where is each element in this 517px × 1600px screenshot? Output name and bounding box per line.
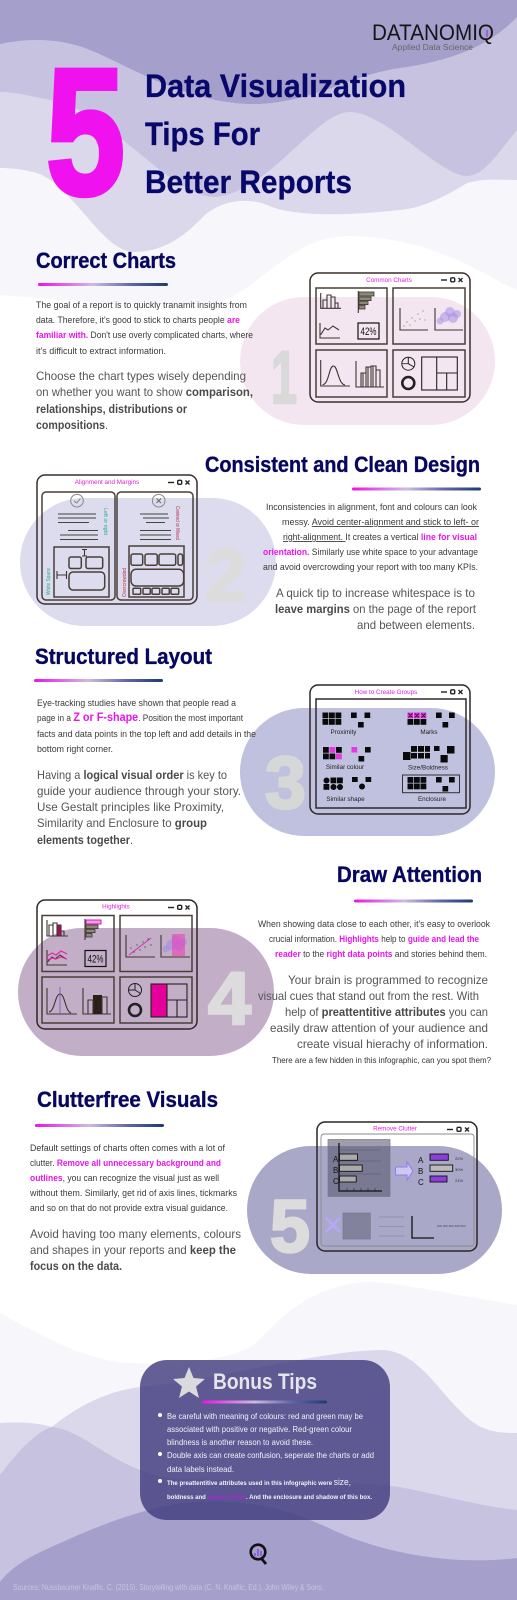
- bullet text: boldness and colour or text. And the enclosure and shadow of this box.: [167, 1494, 372, 1501]
- panel: 2 consistent and clean design: [20, 452, 481, 632]
- window: how to create groups: How to Create Groups: [355, 689, 417, 696]
- large text: Similarity and Enclosure to group: [37, 817, 207, 830]
- large text: and between elements.: [357, 619, 475, 632]
- heading: Structured Layout: [35, 644, 213, 669]
- heading: Bonus Tips: [213, 1369, 317, 1394]
- large text: on whether you want to show comparison,: [36, 386, 253, 399]
- removed items: [326, 1213, 466, 1239]
- blob 4: [18, 928, 274, 1056]
- label: white space: White Space: [46, 568, 52, 595]
- bullet text: The preattentitive attributes used in this infographic were size,: [167, 1477, 351, 1487]
- large text: Having a logical visual order is key to: [37, 769, 227, 782]
- clean bar chart: A: [418, 1156, 424, 1165]
- window: common charts: [310, 273, 470, 402]
- number 2: 2: [205, 534, 246, 617]
- group: size and boldness: [403, 746, 454, 772]
- body text: familiar with. Don't use overly complicated charts, where: [36, 330, 253, 340]
- cluttered bar chart: C: [333, 1177, 339, 1186]
- heading: Correct Charts: [36, 248, 176, 273]
- large text: focus on the data.: [30, 1260, 122, 1273]
- icon: Q logo: [251, 1545, 266, 1564]
- large text: Your brain is programmed to recognize: [288, 974, 488, 987]
- body text: [263, 502, 479, 572]
- bullet text: [167, 1411, 374, 1501]
- window: common charts: 42%: [360, 326, 377, 338]
- body text: reader to the right data points and stories behind them.: [275, 949, 487, 959]
- group: marks: Marks: [420, 729, 438, 736]
- group: size and boldness: Size/Boldness: [408, 764, 448, 772]
- body text: outlines, you can recognize the visual just as well: [30, 1173, 219, 1183]
- window: highlights: 42%: [88, 954, 104, 966]
- window: common charts: Common Charts: [366, 277, 412, 284]
- window: highlights: [37, 900, 197, 1029]
- underline: [354, 900, 473, 902]
- large text: A quick tip to increase whitespace is to: [276, 587, 475, 600]
- removed items: 100 200 300 400 500: [437, 1224, 466, 1228]
- body text: it's difficult to extract information.: [36, 346, 166, 356]
- heading: Draw Attention: [337, 862, 482, 887]
- body text: messy. Avoid center-alignment and stick to left- or: [282, 517, 479, 527]
- underline: [38, 283, 168, 286]
- body text: When showing data close to each other, it's easy to overlook: [258, 919, 491, 929]
- group: similar colour: [323, 747, 371, 771]
- large text: [258, 974, 488, 1051]
- label: centred or mixed: Centred or Mixed: [174, 506, 180, 540]
- blob 2: [20, 498, 276, 626]
- group: similar shape: [324, 777, 371, 803]
- label: overcrowded: Overcrowded: [122, 568, 128, 597]
- group: enclosure: [402, 775, 460, 803]
- number 3: 3: [265, 741, 306, 824]
- body text: and avoid overcrowding your report with too many KPIs.: [263, 562, 478, 572]
- large text: [275, 587, 477, 632]
- large text: relationships, distributions or: [36, 403, 187, 416]
- blob 1: [240, 297, 495, 425]
- cluttered bar chart: A: [333, 1155, 339, 1164]
- large text: compositions.: [36, 419, 108, 432]
- large text: and shapes in your reports and keep the: [30, 1244, 237, 1257]
- body text: page in a Z or F-shape. Position the most important: [37, 712, 244, 724]
- background: bottom waves: [0, 1282, 517, 1600]
- body text: Eye-tracking studies have shown that people read a: [37, 698, 236, 708]
- clean bar chart: B: [418, 1167, 423, 1176]
- large text: [36, 370, 253, 432]
- large text: create visual hierachy of information.: [297, 1038, 488, 1051]
- large text: elements together.: [37, 834, 133, 847]
- underline: [34, 679, 163, 682]
- body text: [258, 919, 491, 959]
- group: proximity: Proximity: [331, 729, 357, 736]
- blob 5: [247, 1146, 502, 1274]
- bullet text: Double axis can create confusion, seperate the charts or add: [167, 1450, 374, 1460]
- blob 3: [240, 708, 495, 836]
- group: marks: [408, 712, 455, 736]
- large text: leave margins on the page of the report: [275, 603, 477, 616]
- body text: and so on that do not provide extra visual guidance.: [30, 1203, 228, 1213]
- underline: [352, 488, 481, 490]
- title: Better Reports: [145, 164, 352, 200]
- title: Data Visualization: [145, 68, 406, 104]
- bullet text: associated with positive or negative. Red-green colour: [167, 1424, 352, 1434]
- group: enclosure: Enclosure: [418, 796, 446, 803]
- logo: DATANOMIQ: DATANOMIQ: [372, 20, 494, 45]
- body text: crucial information. Highlights help to guide and lead the: [269, 934, 479, 944]
- window: how to create groups: [310, 685, 470, 814]
- body text: [36, 300, 253, 356]
- small question: There are a few hidden in this infographic, can you spot them?: [272, 1056, 492, 1065]
- cluttered bar chart: [328, 1140, 390, 1196]
- large text: easily draw attention of your audience and: [270, 1022, 488, 1035]
- number 5: 5: [270, 1185, 310, 1268]
- body text: clutter. Remove all unnecessary background and: [30, 1158, 221, 1168]
- body text: [29, 1143, 238, 1213]
- clean bar chart: 30%: [455, 1167, 463, 1172]
- clean bar chart: 21%: [455, 1178, 463, 1183]
- panel: 5 clutterfree visuals: [29, 1087, 502, 1274]
- logo: DATANOMIQ: Applied Data Science: [392, 43, 474, 52]
- body text: right-alignment. It creates a vertical line for visual: [283, 532, 477, 542]
- group: proximity: [322, 712, 370, 736]
- bullet text: Be careful with meaning of colours: red and green may be: [167, 1411, 363, 1421]
- body text: orientation. Similarly use white space to your advantage: [263, 547, 478, 557]
- group: similar colour: Similar colour: [326, 764, 364, 771]
- body text: Default settings of charts often comes with a lot of: [30, 1143, 226, 1153]
- number 4: 4: [208, 957, 251, 1040]
- large text: visual cues that stand out from the rest. With: [258, 990, 479, 1003]
- bullet text: data labels instead.: [167, 1464, 234, 1474]
- body text: without them. Similarly, get rid of axis lines, tickmarks: [29, 1188, 238, 1198]
- window: alignment and margins: Alignment and Margins: [75, 479, 139, 486]
- group: similar shape: Similar shape: [326, 796, 365, 803]
- large text: Use Gestalt principles like Proximity,: [37, 801, 224, 814]
- heading: Clutterfree Visuals: [37, 1087, 218, 1112]
- body text: facts and data points in the top left and add details in the: [37, 729, 256, 739]
- big number 5: 5: [46, 32, 125, 233]
- number 1: 1: [271, 336, 297, 419]
- title: [145, 68, 406, 200]
- body text: data. Therefore, it's good to stick to charts people are: [36, 315, 240, 325]
- heading: Consistent and Clean Design: [205, 452, 480, 477]
- large text: guide your audience through your story.: [37, 785, 241, 798]
- cluttered bar chart: B: [333, 1166, 338, 1175]
- sources: Sources: Nussbaumer Knaflic, C. (2015). Storytelling with data (C. N. Knaflic, Ed.). John Wiley & Sons.: [13, 1583, 324, 1592]
- underline: [202, 1400, 327, 1404]
- bullet text: blindness is another reason to avoid these.: [167, 1437, 313, 1447]
- body text: Inconsistencies in alignment, font and colours can look: [266, 502, 478, 512]
- label: left or right: Left or right: [102, 508, 108, 535]
- panel: bonus tips: [140, 1360, 390, 1520]
- clean bar chart: C: [418, 1178, 424, 1187]
- body text: The goal of a report is to quickly tranamit insights from: [36, 300, 247, 310]
- large text: [30, 1228, 241, 1273]
- background: top waves: [0, 0, 517, 305]
- body text: bottom right corner.: [37, 744, 113, 754]
- window: alignment and margins: [37, 475, 197, 604]
- clean bar chart: 22%: [455, 1156, 463, 1161]
- icon: star: [173, 1367, 205, 1398]
- body text: [37, 698, 256, 754]
- bullets: [158, 1413, 162, 1483]
- clean bar chart: [418, 1154, 463, 1187]
- window: remove clutter: [317, 1122, 477, 1251]
- window: highlights: Highlights: [102, 904, 130, 910]
- large text: Avoid having too many elements, colours: [30, 1228, 241, 1241]
- large text: Choose the chart types wisely depending: [36, 370, 246, 383]
- panel: 1 correct charts: [36, 248, 495, 432]
- large text: help of preattentitive attributes you can: [285, 1006, 488, 1019]
- panel: 3 structured layout: [34, 644, 495, 847]
- underline: [35, 1124, 164, 1127]
- box: [140, 1360, 390, 1520]
- arrow: [396, 1162, 413, 1180]
- panel: 4 draw attention: [18, 862, 492, 1065]
- large text: [37, 769, 241, 847]
- title: Tips For: [145, 116, 260, 152]
- window: remove clutter: Remove Clutter: [373, 1126, 417, 1132]
